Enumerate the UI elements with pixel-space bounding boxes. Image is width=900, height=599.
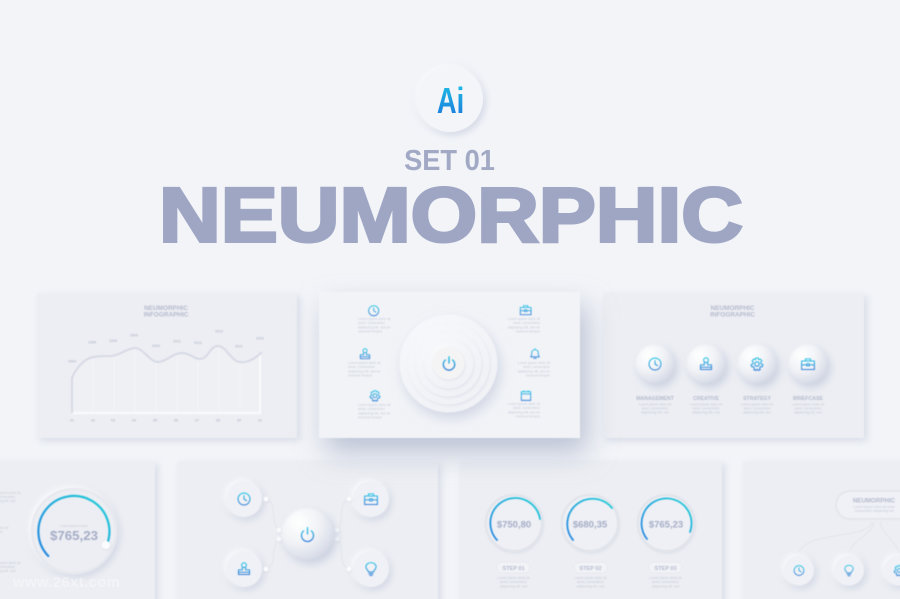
axis labels: 03 bbox=[111, 418, 115, 422]
year labels: 1998 bbox=[88, 340, 96, 344]
item: briefcase: eiusmod tempor bbox=[516, 330, 541, 334]
node: bulb bbox=[353, 551, 389, 587]
item: person bbox=[348, 349, 381, 378]
item: clock bbox=[358, 306, 391, 334]
panel: hierarchy slide bbox=[743, 461, 900, 599]
step 03 label bbox=[649, 562, 682, 588]
item: creative: adipiscing elit, sed bbox=[692, 410, 720, 414]
item: management bbox=[636, 344, 675, 414]
step 01 label: adipiscing elit, sed bbox=[500, 584, 527, 588]
item: person: amet, consectetur bbox=[348, 365, 376, 369]
item: strategy: adipiscing elit, sed bbox=[743, 410, 771, 414]
axis labels: 02 bbox=[91, 418, 95, 422]
item: strategy bbox=[738, 344, 776, 414]
item: management: Lorem ipsum dolor sit bbox=[639, 402, 671, 406]
item: briefcase: Lorem ipsum dolor sit bbox=[792, 402, 824, 406]
gauge: step 01 bbox=[486, 495, 542, 551]
axis labels: 05 bbox=[153, 418, 157, 422]
badge: Ai icon bbox=[417, 66, 483, 132]
item: briefcase bbox=[508, 306, 541, 334]
year labels: 2022 bbox=[256, 336, 264, 340]
year labels bbox=[68, 330, 264, 364]
item: clock: adipiscing elit, sed do bbox=[358, 325, 391, 329]
axis labels bbox=[70, 418, 262, 422]
year labels: 2019 bbox=[215, 330, 223, 334]
step 02 label: amet, consectetur bbox=[577, 580, 605, 584]
axis labels: 04 bbox=[132, 418, 136, 422]
step 03 label: adipiscing elit, sed bbox=[652, 584, 679, 588]
node: person bbox=[226, 551, 262, 587]
panel heading: INFOGRAPHIC bbox=[710, 311, 755, 318]
item: bell: adipiscing elit, sed do bbox=[518, 369, 550, 373]
year labels: 2010 bbox=[152, 344, 160, 348]
item: gear: adipiscing elit, sed do bbox=[358, 411, 391, 415]
item: bell: Lorem ipsum dolor sit bbox=[518, 361, 550, 365]
item: calendar: eiusmod tempor bbox=[516, 415, 541, 419]
step 01 label: amet, consectetur bbox=[500, 580, 528, 584]
item: person: eiusmod tempor bbox=[348, 374, 373, 378]
item: strategy: amet, consectetur bbox=[744, 406, 771, 410]
step 03 label: Lorem ipsum dolor sit bbox=[649, 576, 682, 580]
panel: price steps slide bbox=[460, 461, 722, 599]
axis labels: 09 bbox=[237, 418, 241, 422]
left text fragments bbox=[0, 491, 20, 573]
axis labels: 08 bbox=[216, 418, 220, 422]
subtitle: SET 01 bbox=[404, 144, 495, 176]
item: calendar: amet, consectetur bbox=[513, 406, 541, 410]
step 01 label: STEP 01 bbox=[502, 566, 525, 572]
gauge: step 03 bbox=[638, 495, 694, 551]
panel: radial rings slide bbox=[319, 292, 580, 438]
badge: Ai icon: Ai bbox=[437, 80, 464, 121]
item: person: adipiscing elit, sed do bbox=[348, 369, 381, 373]
item: gear: eiusmod tempor bbox=[358, 416, 383, 420]
item: strategy: Lorem ipsum dolor sit bbox=[741, 402, 773, 406]
gauge: Lorem ipsum dolor bbox=[60, 524, 89, 528]
axis labels: 07 bbox=[195, 418, 199, 422]
title: NEUMORPHIC bbox=[159, 172, 743, 259]
step 02 label: STEP 02 bbox=[579, 566, 602, 572]
connector dots bbox=[264, 497, 351, 571]
year labels: 1994 bbox=[68, 360, 76, 364]
node: clock bbox=[226, 481, 262, 517]
item: gear bbox=[358, 391, 391, 420]
watermark: www.26xt.com bbox=[12, 574, 120, 591]
axis labels: 06 bbox=[174, 418, 178, 422]
item: calendar: adipiscing elit, sed do bbox=[508, 410, 540, 414]
top pill: NEUMORPHIC bbox=[853, 498, 896, 504]
item: creative: amet, consectetur bbox=[693, 406, 720, 410]
item: creative: CREATIVE bbox=[693, 396, 719, 402]
axis labels: 01 bbox=[70, 418, 74, 422]
step 02 label bbox=[574, 562, 607, 588]
node: clock bbox=[784, 556, 814, 586]
step 01 label: Lorem ipsum dolor sit bbox=[497, 576, 530, 580]
item: management: amet, consectetur bbox=[642, 406, 669, 410]
item: clock: amet, consectetur bbox=[358, 321, 386, 325]
item: briefcase: amet, consectetur bbox=[513, 321, 541, 325]
item: clock: Lorem ipsum dolor sit bbox=[358, 317, 390, 321]
gauge bbox=[32, 489, 116, 573]
item: briefcase: Lorem ipsum dolor sit bbox=[508, 317, 540, 321]
connectors bbox=[266, 499, 349, 569]
item: creative: Lorem ipsum dolor sit bbox=[690, 402, 722, 406]
step 03 label: amet, consectetur bbox=[652, 580, 680, 584]
step 02 label: Lorem ipsum dolor sit bbox=[574, 576, 607, 580]
item: management: adipiscing elit, sed bbox=[641, 410, 669, 414]
item: bell: eiusmod tempor bbox=[526, 374, 551, 378]
panel heading: INFOGRAPHIC bbox=[144, 311, 189, 318]
connectors bbox=[799, 522, 899, 553]
panel: mind map slide bbox=[177, 461, 438, 599]
item: bell bbox=[518, 349, 551, 378]
year labels: 2009 bbox=[130, 334, 138, 338]
step 01 label bbox=[497, 562, 530, 588]
item: briefcase: adipiscing elit, sed do bbox=[508, 325, 540, 329]
gauge: step 01: $750,80 bbox=[497, 520, 531, 530]
panel heading: NEUMORPHIC bbox=[144, 305, 188, 312]
panel: spheres slide bbox=[603, 293, 864, 438]
item: briefcase bbox=[788, 344, 828, 414]
node: bulb bbox=[834, 556, 864, 586]
top pill: Lorem ipsum dolor sit amet bbox=[854, 505, 894, 509]
item: briefcase: amet, consectetur bbox=[795, 406, 822, 410]
step 02 label: adipiscing elit, sed bbox=[577, 584, 604, 588]
node: gear bbox=[884, 556, 900, 586]
item: person: Lorem ipsum dolor sit bbox=[348, 361, 380, 365]
area line chart bbox=[72, 346, 262, 413]
step 03 label: STEP 03 bbox=[654, 566, 677, 572]
item: gear: Lorem ipsum dolor sit bbox=[358, 403, 390, 407]
item: management: MANAGEMENT bbox=[636, 396, 675, 402]
node: briefcase bbox=[353, 481, 389, 517]
panel heading: NEUMORPHIC bbox=[711, 305, 754, 312]
panel: gauge slide bbox=[0, 461, 155, 599]
item: calendar: Lorem ipsum dolor sit bbox=[508, 402, 540, 406]
gauge: step 03: $765,23 bbox=[649, 520, 683, 530]
axis labels: 10 bbox=[258, 418, 262, 422]
year labels: 2011 bbox=[173, 340, 181, 344]
concentric rings bbox=[400, 314, 498, 412]
item: clock: eiusmod tempor bbox=[358, 330, 383, 334]
item: gear: amet, consectetur bbox=[358, 407, 386, 411]
item: briefcase: BRIEFCASE bbox=[793, 396, 824, 402]
top pill: consectetur adipiscing elit bbox=[855, 509, 893, 513]
year labels: 2021 bbox=[235, 344, 243, 348]
item: creative bbox=[686, 344, 726, 414]
panel: line chart slide bbox=[37, 293, 297, 438]
item: calendar bbox=[508, 391, 541, 419]
gauge: step 02 bbox=[562, 495, 618, 551]
item: briefcase: adipiscing elit, sed bbox=[794, 410, 822, 414]
central sphere bbox=[282, 508, 334, 560]
item: bell: amet, consectetur bbox=[523, 365, 551, 369]
year labels: 2013 bbox=[194, 341, 202, 345]
top pill bbox=[836, 491, 900, 519]
gauge: step 02: $680,35 bbox=[573, 520, 608, 530]
year labels: 1999 bbox=[109, 339, 117, 343]
item: strategy: STRATEGY bbox=[743, 396, 771, 402]
gauge: $765,23 bbox=[50, 528, 98, 543]
